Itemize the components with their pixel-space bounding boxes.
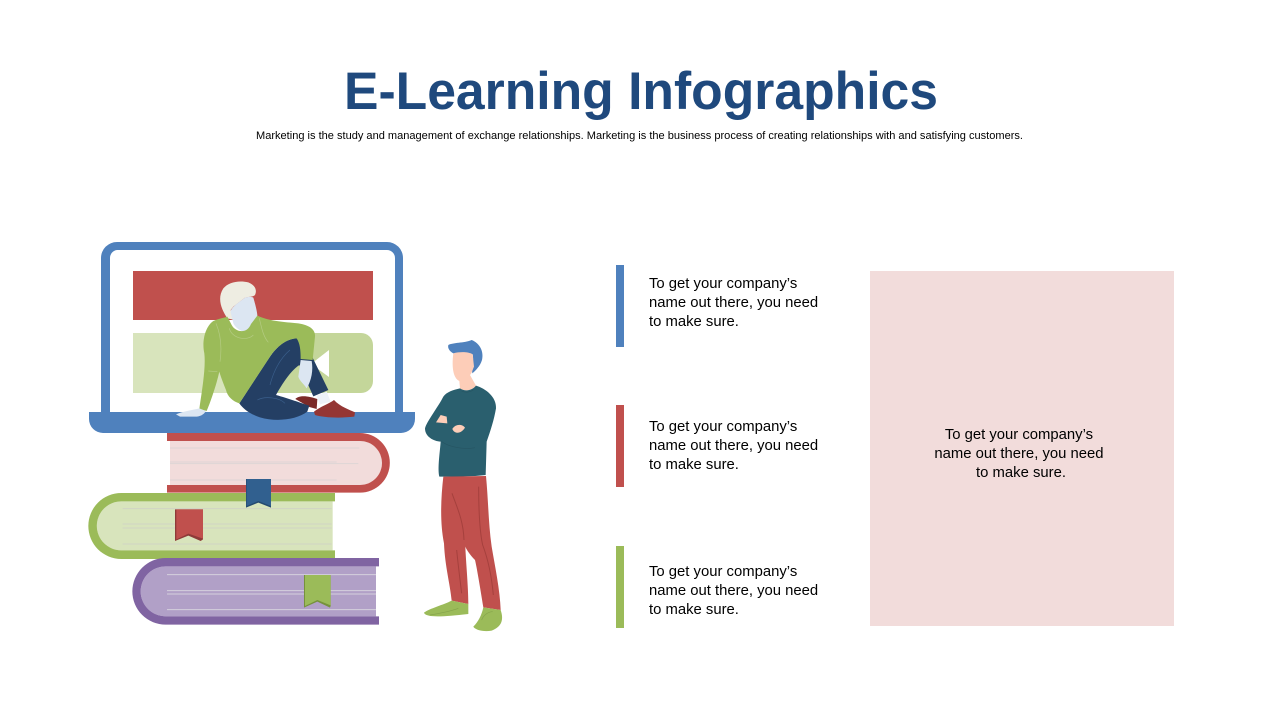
item 3: green bar and text: To get your company’s [649,564,797,580]
book: red [167,433,390,493]
bookmark: green [304,575,331,608]
panel: pink callout: To get your company’s [945,427,1093,443]
video banner [133,271,373,320]
item 1: blue bar and text: name out there, you need [649,295,818,311]
bookmark: blue [246,479,271,508]
illustration: books [88,433,390,625]
item 2: red bar and text: name out there, you need [649,438,818,454]
panel: pink callout [870,271,1174,626]
item 1: blue bar and text: To get your company’s [649,276,797,292]
panel: pink callout: name out there, you need [934,446,1104,462]
item 2: red bar and text [616,405,822,487]
item 2: red bar and text: to make sure. [649,457,739,473]
illustration: seated man [176,281,355,420]
item 1: blue bar and text [616,265,822,347]
laptop screen frame [101,242,403,414]
illustration: laptop [89,242,415,433]
subtitle: Marketing is the study and management of exchange relationships. Marketing is the business process of creating relationships with and satisfying customers. [256,130,1023,142]
book: purple [132,558,379,625]
bookmark: red [175,509,203,541]
item 1: blue bar and text: to make sure. [649,314,739,330]
illustration: standing man legs [424,476,502,631]
item 3: green bar and text [616,546,822,628]
item 2: red bar and text: To get your company’s [649,419,797,435]
title: E-Learning Infographics [344,62,938,121]
illustration: standing man upper body [425,340,496,477]
panel: pink callout: to make sure. [976,465,1066,481]
video player [133,333,373,393]
item 3: green bar and text: to make sure. [649,602,739,618]
item 3: green bar and text: name out there, you need [649,583,818,599]
book: green [88,493,335,559]
laptop base [89,412,415,433]
